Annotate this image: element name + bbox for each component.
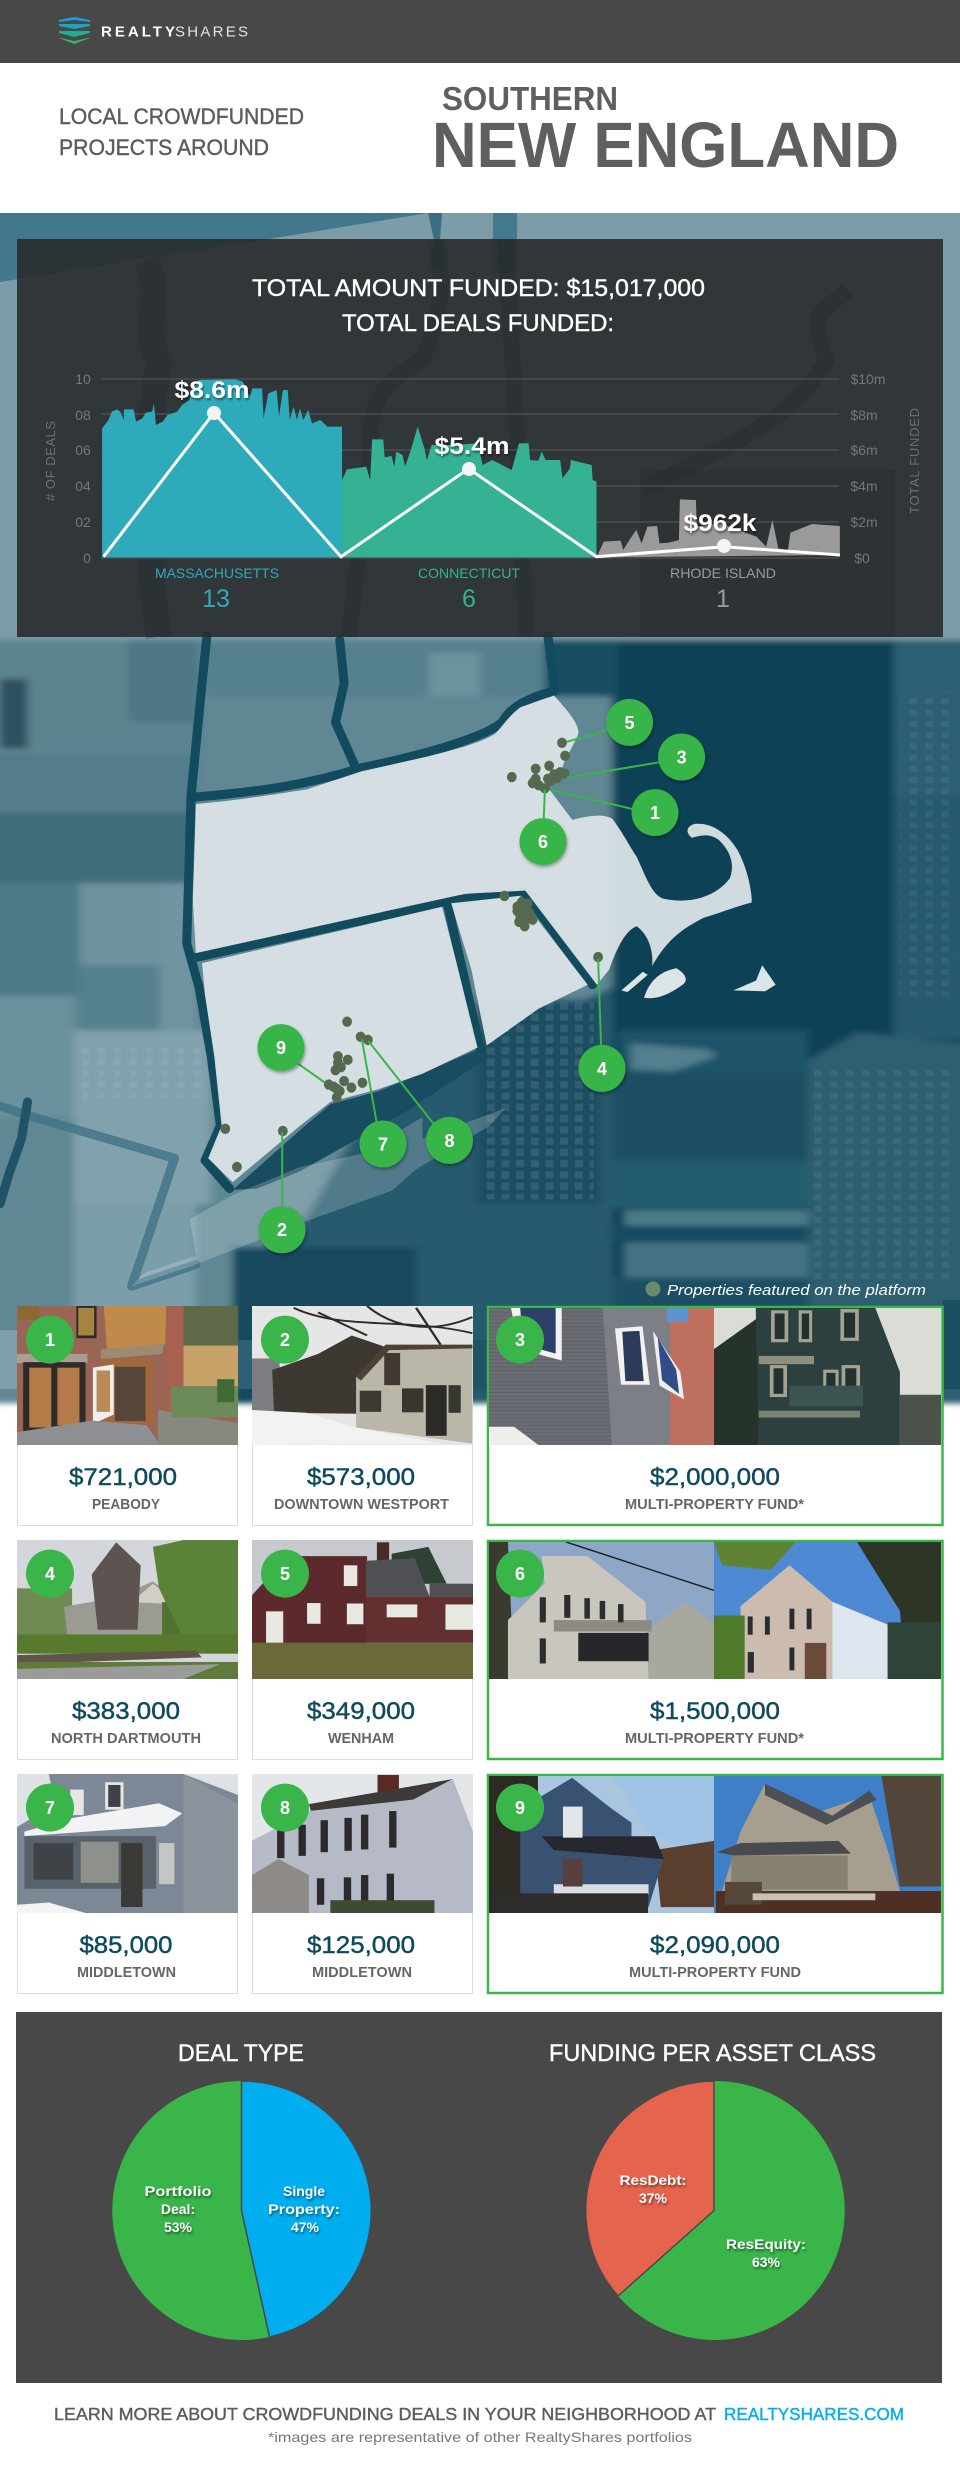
card 5: Wenham: WENHAM: [328, 1730, 394, 1747]
panel: funding summary: TOTAL AMOUNT FUNDED: $15,017,000: [252, 275, 705, 302]
chart: deals and funding by state: $4m: [850, 478, 878, 494]
footer call to action: REALTYSHARES.COM: [724, 2404, 904, 2424]
photo badge 5: [261, 1550, 309, 1598]
card 6: Multi-property fund: [488, 1541, 942, 1759]
photo badge 5: 5: [280, 1564, 290, 1584]
card 9: Multi-property fund: MULTI-PROPERTY FUND: [629, 1964, 801, 1981]
chart: deals and funding by state: $6m: [850, 442, 878, 458]
pie: funding per asset class: [549, 2040, 876, 2340]
map number badges: [258, 699, 705, 1253]
chart: deals and funding by state: 6: [462, 585, 476, 613]
card 7: Middletown: MIDDLETOWN: [77, 1964, 176, 1981]
legend: Properties featured on the platform: [667, 1282, 926, 1299]
footnote: *images are representative of other RealtyShares portfolios: [268, 2429, 692, 2445]
pie: deal type: [112, 2040, 371, 2340]
card 4: North Dartmouth: $383,000: [72, 1698, 180, 1725]
card 1: Peabody: PEABODY: [92, 1496, 160, 1513]
chart: deals and funding by state: CONNECTICUT: [418, 565, 520, 581]
chart: deals and funding by state: [43, 371, 922, 613]
card 3: Multi-property fund: MULTI-PROPERTY FUND*: [625, 1496, 804, 1513]
photo badge 6: [496, 1550, 544, 1598]
map number badges: 4: [597, 1059, 607, 1079]
map number badges: 7: [378, 1134, 388, 1154]
pie: deal type: 47%: [291, 2219, 320, 2235]
logo: SHARES: [175, 24, 248, 40]
photo badge 7: [26, 1784, 74, 1832]
footer call to action: LEARN MORE ABOUT CROWDFUNDING DEALS IN YOUR NEIGHBORHOOD AT: [54, 2404, 716, 2424]
chart: deals and funding by state: 04: [75, 478, 91, 494]
title: NEW ENGLAND: [432, 109, 899, 181]
card 9: Multi-property fund: [488, 1775, 942, 1993]
map number badges: 8: [444, 1131, 455, 1151]
chart: deals and funding by state: 0: [83, 550, 91, 566]
photo badge 4: [26, 1550, 74, 1598]
map number badges: 6: [538, 832, 548, 852]
pie: funding per asset class: ResDebt:: [620, 2172, 686, 2188]
chart: deals and funding by state: $8.6m: [174, 377, 250, 404]
photo badge 3: 3: [515, 1330, 525, 1350]
chart: deals and funding by state: $962k: [684, 510, 757, 537]
photo badge 1: [26, 1316, 74, 1364]
photo badge 1: 1: [45, 1330, 55, 1350]
chart: deals and funding by state: 1: [716, 585, 730, 613]
photo badge 9: 9: [515, 1798, 525, 1818]
header bar: [0, 0, 960, 63]
title: SOUTHERN: [442, 80, 618, 117]
logo: REALTY: [101, 24, 175, 40]
chart: deals and funding by state: MASSACHUSETTS: [155, 565, 279, 581]
photo badge 4: 4: [45, 1564, 55, 1584]
card 2: Downtown Westport: [252, 1306, 473, 1526]
panel: funding summary: [17, 239, 943, 637]
card 8: Middletown: MIDDLETOWN: [312, 1964, 412, 1981]
pie: deal type: Deal:: [161, 2201, 195, 2217]
map number badges: 2: [277, 1220, 287, 1240]
intro text: [59, 104, 304, 160]
card 2: Downtown Westport: DOWNTOWN WESTPORT: [274, 1496, 449, 1513]
photo badge 3: [496, 1316, 544, 1364]
map number badges: 5: [624, 713, 635, 733]
chart: deals and funding by state: RHODE ISLAND: [670, 565, 776, 581]
map number badges: 1: [650, 803, 660, 823]
map border bands: [0, 636, 593, 1286]
card 3: Multi-property fund: [488, 1307, 942, 1525]
card 6: Multi-property fund: $1,500,000: [650, 1698, 780, 1725]
photo badge 8: 8: [280, 1798, 290, 1818]
card 5: Wenham: $349,000: [307, 1698, 415, 1725]
card 5: Wenham: [252, 1540, 473, 1760]
card 2: Downtown Westport: $573,000: [307, 1464, 415, 1491]
pie: deal type: DEAL TYPE: [178, 2040, 304, 2067]
chart: deals and funding by state: 13: [202, 585, 230, 613]
card 4: North Dartmouth: [17, 1540, 238, 1760]
map of southern New England: [193, 696, 776, 1253]
white title band: [0, 63, 960, 213]
intro text: PROJECTS AROUND: [59, 135, 269, 160]
card 6: Multi-property fund: MULTI-PROPERTY FUND*: [625, 1730, 804, 1747]
map number badges: 3: [677, 748, 687, 768]
card 1: Peabody: $721,000: [69, 1464, 177, 1491]
card 8: Middletown: [252, 1774, 473, 1994]
card 3: Multi-property fund: $2,000,000: [650, 1464, 780, 1491]
chart: deals and funding by state: $10m: [850, 371, 886, 387]
chart: deals and funding by state: $2m: [850, 514, 878, 530]
card 7: Middletown: [17, 1774, 238, 1994]
pie: funding per asset class: ResEquity:: [726, 2236, 806, 2252]
card 1: Peabody: [17, 1306, 238, 1526]
photo badge 8: [261, 1784, 309, 1832]
logo: [59, 17, 248, 44]
chart: deals and funding by state: $5.4m: [434, 433, 510, 460]
panel: funding summary: TOTAL DEALS FUNDED:: [342, 310, 614, 337]
card 9: Multi-property fund: $2,090,000: [650, 1932, 780, 1959]
pie: funding per asset class: 37%: [639, 2190, 668, 2206]
chart: deals and funding by state: 06: [75, 442, 91, 458]
card 8: Middletown: $125,000: [307, 1932, 415, 1959]
panel: pie charts: [16, 2012, 942, 2383]
card 4: North Dartmouth: NORTH DARTMOUTH: [51, 1730, 201, 1747]
pie: funding per asset class: FUNDING PER ASSET CLASS: [549, 2040, 876, 2067]
background: aerial city photo in teal: [0, 206, 960, 1403]
photo badge 9: [496, 1784, 544, 1832]
pie: deal type: Portfolio: [144, 2183, 212, 2199]
map number badges: 9: [276, 1038, 286, 1058]
chart: deals and funding by state: 02: [75, 514, 91, 530]
chart: deals and funding by state: TOTAL FUNDED: [907, 408, 922, 514]
pie: deal type: Single: [283, 2183, 325, 2199]
photo badge 7: 7: [45, 1798, 55, 1818]
photo badge 2: 2: [280, 1330, 290, 1350]
photo badge 6: 6: [515, 1564, 525, 1584]
chart: deals and funding by state: $0: [854, 550, 870, 566]
chart: deals and funding by state: # OF DEALS: [43, 421, 58, 501]
chart: deals and funding by state: $8m: [850, 407, 878, 423]
photo badge 2: [261, 1316, 309, 1364]
pie: deal type: 53%: [164, 2219, 193, 2235]
intro text: LOCAL CROWDFUNDED: [59, 104, 304, 129]
title: [432, 80, 899, 181]
chart: deals and funding by state: 10: [75, 371, 91, 387]
pie: deal type: Property:: [268, 2201, 340, 2217]
chart: deals and funding by state: 08: [75, 407, 91, 423]
card 7: Middletown: $85,000: [80, 1932, 172, 1959]
pie: funding per asset class: 63%: [752, 2254, 781, 2270]
